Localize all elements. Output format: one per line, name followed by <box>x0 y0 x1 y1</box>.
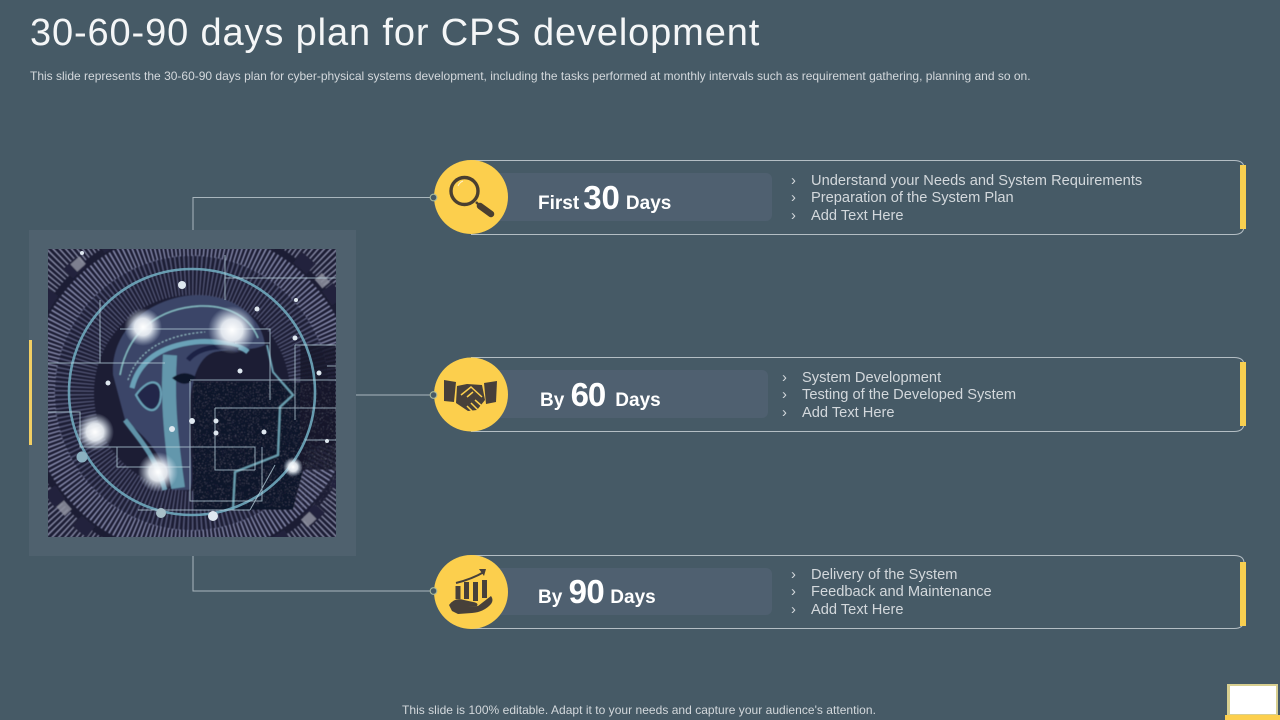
list: 30 day tasks <box>791 172 1142 224</box>
list: 60 day tasks: › <box>782 370 787 386</box>
text: Add Text Here <box>811 602 904 618</box>
connector: bottom <box>193 556 437 594</box>
list: 30 day tasks: › <box>791 190 796 206</box>
footer note: This slide is 100% editable. Adapt it to your needs and capture your audience's attention. <box>402 703 876 717</box>
text: Add Text Here <box>811 208 904 224</box>
connector: top <box>193 194 437 230</box>
list: 90 day tasks <box>791 566 992 618</box>
list: 60 day tasks <box>782 370 1016 420</box>
globe ring <box>69 269 315 515</box>
subtitle description: This slide represents the 30-60-90 days plan for cyber-physical systems development, including the tasks performed at monthly intervals such as requirement gathering, planning and so on. <box>30 69 1031 83</box>
circuit lines <box>48 255 336 510</box>
title: 30-60-90 days plan for CPS development <box>30 12 760 54</box>
list: 30 day tasks: › <box>791 208 796 224</box>
heading: First 30 Days: First30 Days <box>538 179 671 216</box>
text: Feedback and Maintenance <box>811 584 992 600</box>
diagram graphics <box>29 160 1280 720</box>
panel: image frame <box>29 230 356 556</box>
text: Add Text Here <box>802 404 895 420</box>
list: 30 day tasks: › <box>791 172 796 188</box>
radial circuit stripes <box>48 249 336 537</box>
list: 60 day tasks: › <box>782 387 787 403</box>
list: 90 day tasks: › <box>791 602 796 618</box>
accent bar <box>29 340 32 445</box>
icon: handshake <box>434 358 508 432</box>
nodes <box>76 251 329 521</box>
heading: By 90 Days: By 90 Days <box>538 573 656 610</box>
heading band: 30 days <box>480 173 772 221</box>
dark space on the right <box>193 382 336 510</box>
picture: brain and circuit network <box>48 249 336 537</box>
text: Delivery of the System <box>811 566 957 582</box>
text: Understand your Needs and System Requirements <box>811 172 1142 188</box>
face profile <box>233 345 293 510</box>
star speckle <box>193 382 336 507</box>
heading band: 90 days <box>480 568 772 615</box>
icon: magnifying glass <box>434 160 508 234</box>
icon: corner laptop mark <box>1225 684 1280 720</box>
list: 60 day tasks: › <box>782 404 787 420</box>
accent bar: 30 days <box>1240 165 1246 229</box>
icon: hand with rising chart <box>434 555 508 629</box>
card outline: 60 days <box>471 358 1244 432</box>
text: System Development <box>802 370 941 386</box>
heading: By 60 Days: By 60 Days <box>540 376 661 413</box>
heading band: 60 days <box>480 370 768 418</box>
brain <box>113 295 265 490</box>
list: 90 day tasks: › <box>791 566 796 582</box>
text: Testing of the Developed System <box>802 387 1016 403</box>
accent bar: 60 days <box>1240 362 1246 426</box>
connector: middle <box>356 392 437 398</box>
light glows <box>124 308 162 346</box>
card outline: 90 days <box>471 556 1244 628</box>
accent bar: 90 days <box>1240 562 1246 626</box>
text: Preparation of the System Plan <box>811 190 1014 206</box>
card outline: 30 days <box>471 160 1244 234</box>
list: 90 day tasks: › <box>791 584 796 600</box>
